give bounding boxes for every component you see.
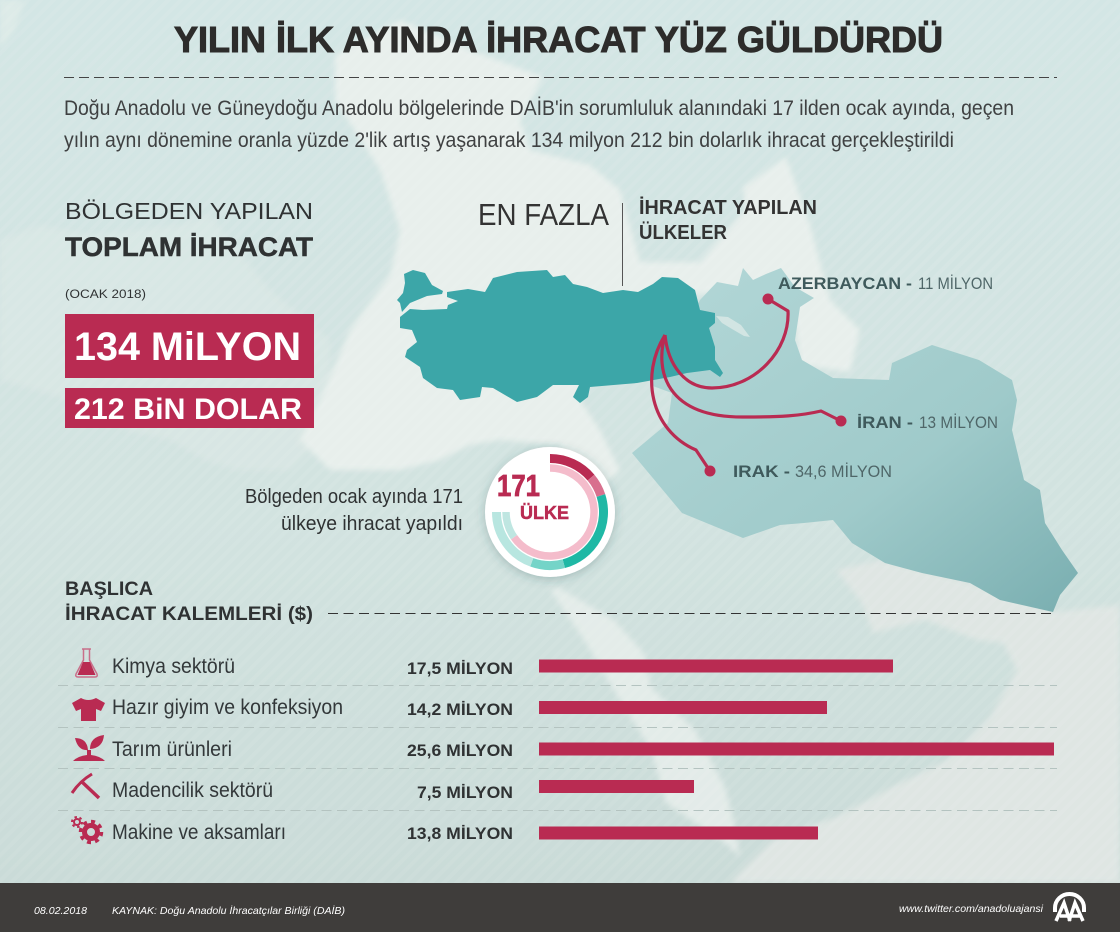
icon: t-shirt	[72, 698, 105, 721]
footer	[0, 883, 1120, 932]
row: machinery: Makine ve aksamları	[112, 820, 286, 844]
arrow: Iraq	[652, 335, 710, 471]
icon: pickaxe	[72, 774, 99, 798]
row: clothing	[72, 695, 827, 721]
label: Iran: İRAN -	[857, 413, 913, 432]
callout: 212 thousand dollars: 212 BiN DOLAR	[74, 393, 302, 426]
icon: Anadolu Agency logo	[1055, 894, 1084, 921]
label: Iraq	[704, 462, 892, 481]
row: clothing: 14,2 MİLYON	[407, 700, 513, 719]
label: Azerbaijan: AZERBAYCAN -	[778, 274, 912, 293]
row: agriculture	[73, 735, 1054, 761]
donut chart: 171 countries	[485, 447, 615, 577]
callout: 134 million	[65, 314, 314, 378]
footer: www.twitter.com/anadoluajansi	[899, 903, 1044, 915]
heading: top export countries	[478, 196, 817, 286]
map: Turkey	[397, 270, 723, 403]
donut chart: 171 countries: ÜLKE	[520, 503, 569, 523]
row: agriculture: 25,6 MİLYON	[407, 741, 513, 760]
heading: top export countries: İHRACAT YAPILAN	[639, 196, 817, 219]
row: machinery: 13,8 MİLYON	[407, 824, 513, 843]
arrow: Azerbaijan	[665, 299, 788, 388]
heading: top export countries: EN FAZLA	[478, 197, 609, 232]
heading: main export items	[65, 579, 313, 625]
row: agriculture: Tarım ürünleri	[112, 737, 232, 761]
intro text	[64, 96, 1014, 152]
row: clothing: Hazır giyim ve konfeksiyon	[112, 695, 343, 719]
heading: total exports	[65, 198, 314, 301]
heading: main export items: BAŞLICA	[65, 579, 153, 600]
heading: total exports: (OCAK 2018)	[65, 289, 146, 301]
text: 171 countries note: ülkeye ihracat yapıldı	[281, 513, 463, 535]
heading: main export items: İHRACAT KALEMLERİ ($)	[65, 604, 313, 625]
panel: total exports	[65, 198, 314, 428]
row: mining: 7,5 MİLYON	[417, 783, 513, 802]
heading: total exports: BÖLGEDEN YAPILAN	[65, 198, 313, 224]
label: Iraq: 34,6 MİLYON	[795, 462, 892, 481]
label: Iran	[836, 413, 998, 432]
icon: flask	[76, 649, 97, 677]
title: YILIN İLK AYINDA İHRACAT YÜZ GÜLDÜRDÜ	[174, 19, 943, 60]
map: neighbouring countries	[632, 268, 1078, 612]
label: Iran: 13 MİLYON	[919, 413, 998, 432]
donut chart: 171 countries: 171	[497, 468, 540, 503]
arrows: export routes	[652, 299, 841, 471]
label: Iraq: IRAK -	[733, 462, 790, 481]
intro text: Doğu Anadolu ve Güneydoğu Anadolu bölgelerinde DAİB'in sorumluluk alanındaki 17 ilden ocak ayında, geçen	[64, 96, 1014, 120]
row: mining	[72, 774, 694, 802]
callout: 134 million: 134 MiLYON	[74, 325, 301, 369]
footer: KAYNAK: Doğu Anadolu İhracatçılar Birliği (DAİB)	[112, 905, 345, 917]
text: 171 countries note: Bölgeden ocak ayında 171	[245, 486, 463, 508]
label: Azerbaijan	[762, 274, 993, 304]
icon: gears	[72, 817, 102, 842]
icon: sprout	[73, 735, 105, 761]
heading: top export countries: ÜLKELER	[639, 221, 728, 244]
row: mining: Madencilik sektörü	[112, 778, 273, 802]
row: chemicals	[76, 649, 893, 678]
heading: total exports: TOPLAM İHRACAT	[65, 232, 314, 262]
row: machinery	[72, 817, 818, 844]
intro text: yılın aynı dönemine oranla yüzde 2'lik artış yaşanarak 134 milyon 212 bin dolarlık ihracat gerçekleştirildi	[64, 128, 954, 152]
row: chemicals: Kimya sektörü	[112, 654, 235, 678]
row: chemicals: 17,5 MİLYON	[407, 659, 513, 678]
text: 171 countries note	[245, 486, 463, 535]
footer: 08.02.2018	[34, 905, 87, 917]
label: Azerbaijan: 11 MİLYON	[918, 274, 993, 293]
arrow: Iran	[662, 335, 841, 421]
